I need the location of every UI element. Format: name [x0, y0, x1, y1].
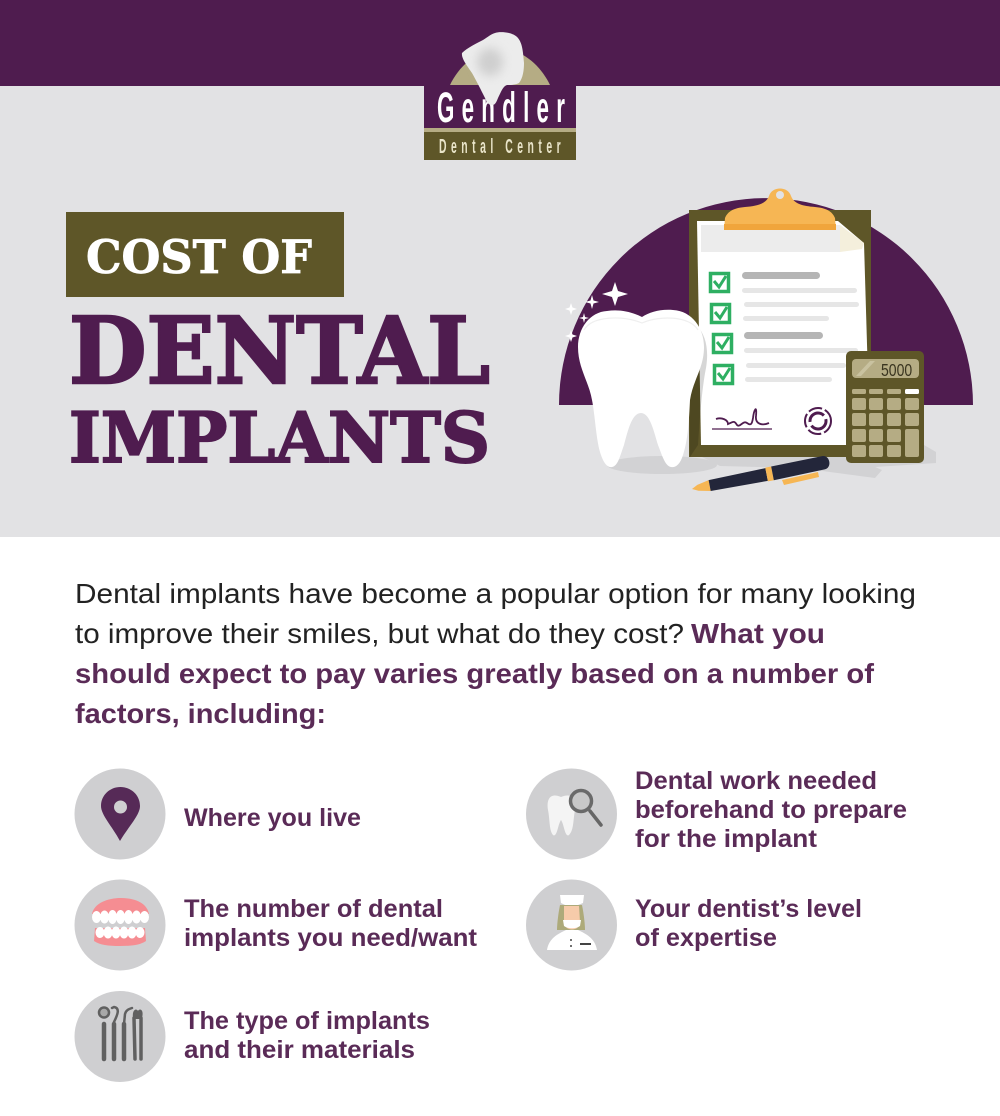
logo tooth: [462, 32, 524, 105]
intro line 2 bold: What you: [691, 618, 825, 649]
check marks: [714, 276, 730, 379]
item: number of implants: [74, 880, 478, 970]
pen clip: [782, 472, 819, 485]
title: cost of: COST OF: [86, 230, 312, 284]
item: preparatory dental work: [526, 767, 907, 860]
title: [66, 212, 490, 479]
signature: [712, 409, 772, 429]
title: dental: DENTAL: [69, 297, 490, 405]
calculator: [846, 351, 924, 463]
stamp: [805, 408, 831, 434]
title: implants: IMPLANTS: [69, 398, 490, 479]
title label box: [66, 212, 344, 297]
intro line 1: Dental implants have become a popular option for many looking: [75, 578, 916, 609]
item: preparatory dental work: beforehand to prepare: [635, 796, 907, 824]
label: The number of dental: [184, 895, 443, 923]
tooth crown shading: [584, 318, 698, 330]
intro line 4: factors, including:: [75, 698, 326, 729]
label: Your dentist’s level: [635, 895, 862, 923]
logo wordmark: Gendler: [437, 84, 565, 132]
illustration: tooth, clipboard, calculator and pen: [559, 188, 973, 496]
intro paragraph: [75, 578, 916, 729]
sparkles: [565, 282, 628, 342]
large tooth: [578, 310, 704, 467]
logo: Gendler Dental Center: [424, 32, 576, 160]
document lines: [742, 272, 859, 382]
clipboard: [689, 188, 871, 457]
item: dentist expertise: [526, 880, 862, 970]
label: Where you live: [184, 804, 361, 832]
icon: dental tools: [99, 1007, 142, 1059]
item: number of implants: implants you need/want: [184, 924, 478, 952]
pen: [691, 455, 831, 496]
paper: [697, 221, 870, 445]
tooth shadow on clipboard: [689, 326, 707, 457]
logo subline: Dental Center: [439, 137, 561, 158]
intro line 2: to improve their smiles, but what do they cost?: [75, 618, 684, 649]
icon: dentist with mask: [547, 895, 597, 950]
label: Dental work needed: [635, 767, 877, 795]
item: where you live: [74, 768, 361, 860]
clip: [724, 188, 836, 230]
icon: dentures: [92, 898, 149, 946]
icon: tooth and magnifier: [548, 790, 601, 835]
item: preparatory dental work: for the implant: [635, 825, 818, 853]
calculator display value: 5000: [881, 360, 912, 380]
purple semicircle: [559, 198, 973, 405]
label: The type of implants: [184, 1007, 430, 1035]
item: implant type: [74, 991, 430, 1082]
top purple band: [0, 0, 1000, 86]
item: implant type: and their materials: [184, 1036, 415, 1064]
hero background: [0, 86, 1000, 537]
icon: location pin: [101, 787, 140, 841]
calculator keys: [852, 389, 919, 457]
item: dentist expertise: of expertise: [635, 924, 777, 952]
checkboxes: [710, 274, 732, 384]
ground shadows: [607, 445, 936, 478]
intro line 3: should expect to pay varies greatly based on a number of: [75, 658, 875, 689]
